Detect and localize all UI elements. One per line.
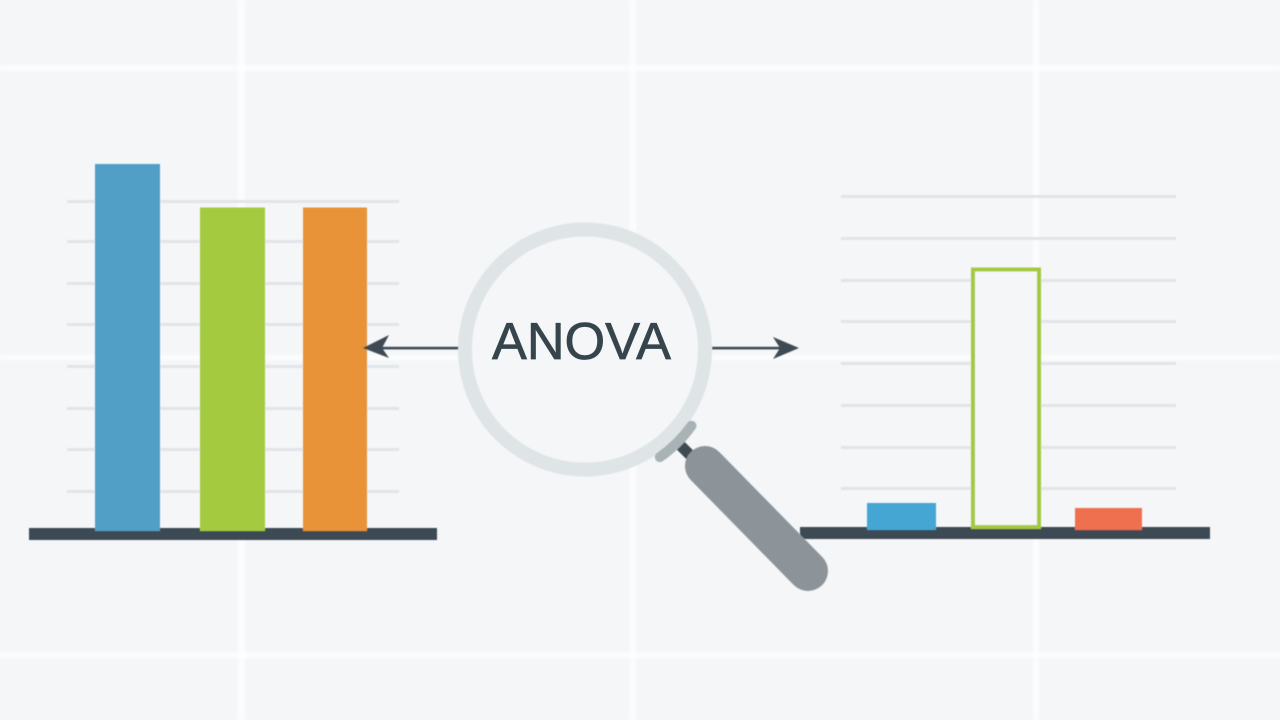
icon: magnifying glass <box>465 230 808 571</box>
magnifier handle <box>705 466 808 571</box>
right chart baseline <box>800 527 1210 539</box>
arrow: right <box>712 337 799 359</box>
bar: green outline <box>973 270 1039 527</box>
left chart baseline <box>29 528 437 540</box>
panel: right bar chart <box>800 195 1210 539</box>
panel: left bar chart <box>29 164 437 540</box>
bar: small red <box>1075 508 1142 530</box>
magnifier neck <box>680 445 698 463</box>
right chart grid lines <box>841 195 1176 490</box>
bar: blue <box>95 164 160 531</box>
title: ANOVA: ANOVA <box>492 313 671 371</box>
bar: small blue <box>867 503 936 530</box>
bar: green <box>200 208 265 531</box>
left chart grid lines <box>67 200 399 493</box>
arrow: left <box>363 335 459 358</box>
bar: orange <box>303 208 367 531</box>
magnifier lens <box>465 230 705 470</box>
magnifier collar <box>660 426 692 457</box>
